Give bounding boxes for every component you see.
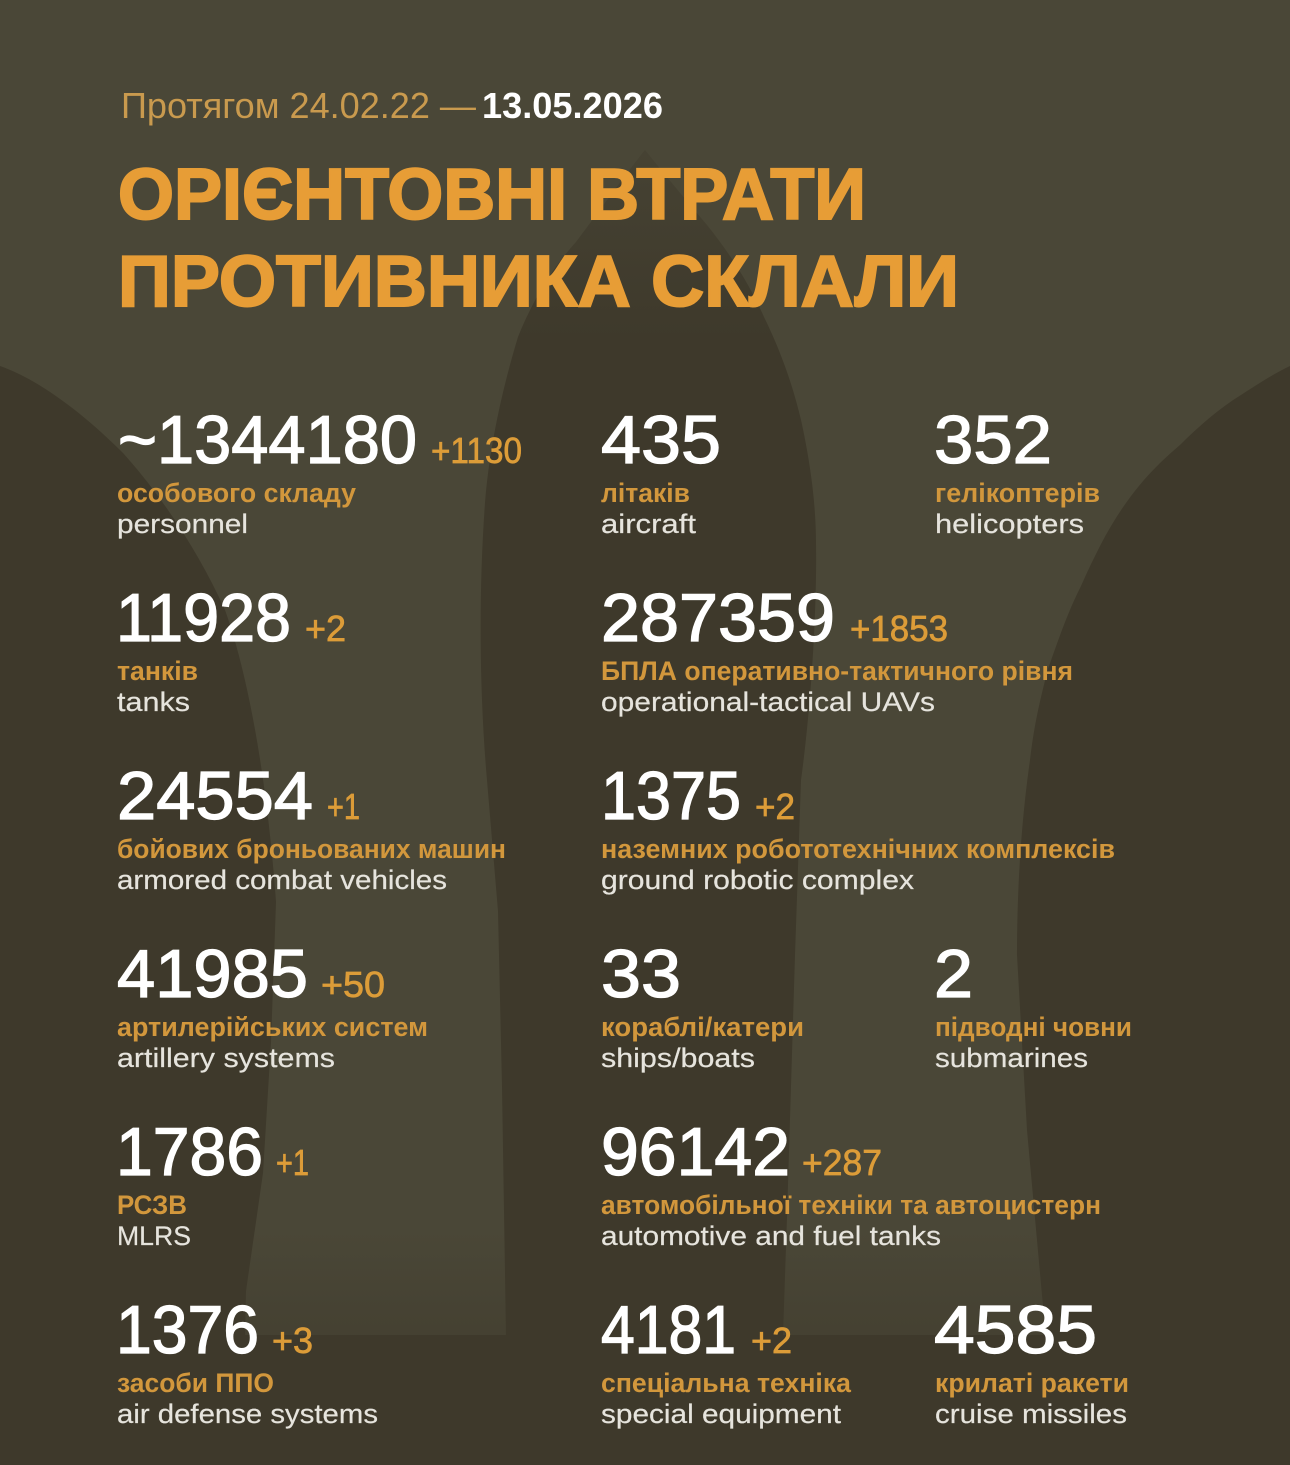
stat: aircraft: aircraft: [601, 509, 697, 539]
stat: special equipment: спеціальна техніка: [601, 1368, 852, 1398]
stat: MLRS: РСЗВ: [117, 1190, 187, 1220]
stat: ground robotic complex: наземних робототехнічних комплексів: [601, 834, 1115, 864]
stat: helicopters: helicopters: [935, 509, 1084, 539]
stat: automotive and fuel tanks: автомобільної техніки та автоцистерн: [601, 1190, 1101, 1220]
stat: operational-tactical UAVs: operational-tactical UAVs: [601, 687, 935, 717]
stat: artillery systems: +50: [321, 964, 385, 1005]
stat: cruise missiles: крилаті ракети: [935, 1368, 1129, 1398]
stat: ground robotic complex: +2: [755, 786, 795, 827]
stat: operational-tactical UAVs: +1853: [850, 608, 948, 649]
stat: ships/boats: 33: [601, 936, 681, 1012]
stat: helicopters: гелікоптерів: [935, 478, 1100, 508]
stat: artillery systems: artillery systems: [117, 1043, 335, 1073]
date range line: 13.05.2026: [482, 85, 663, 126]
stat: submarines: 2: [934, 936, 973, 1012]
stat: operational-tactical UAVs: [601, 580, 1073, 717]
stat: ground robotic complex: [601, 758, 1115, 895]
stat: MLRS: 1786: [116, 1114, 263, 1190]
stat: cruise missiles: cruise missiles: [935, 1399, 1127, 1429]
stat: special equipment: +2: [751, 1320, 792, 1361]
stat: armored combat vehicles: 24554: [117, 758, 313, 834]
stat: tanks: танків: [117, 656, 198, 686]
stat: automotive and fuel tanks: automotive and fuel tanks: [601, 1221, 941, 1251]
stat: personnel: [117, 402, 522, 539]
date range line: [121, 85, 663, 126]
stat: artillery systems: 41985: [117, 936, 308, 1012]
stat: personnel: +1130: [431, 430, 522, 471]
title: [118, 155, 959, 322]
stat: operational-tactical UAVs: 287359: [601, 580, 835, 656]
stat: submarines: submarines: [935, 1043, 1088, 1073]
date range line: Протягом 24.02.22 —: [121, 85, 476, 126]
stat: ships/boats: ships/boats: [601, 1043, 755, 1073]
stat: submarines: [934, 936, 1132, 1073]
stat: tanks: 11928: [116, 580, 291, 656]
stat: personnel: ~1344180: [118, 402, 417, 478]
title: ОРІЄНТОВНІ ВТРАТИ: [118, 155, 866, 235]
stat: personnel: особового складу: [117, 478, 356, 508]
stat: MLRS: +1: [276, 1142, 309, 1183]
stat: ground robotic complex: 1375: [601, 758, 741, 834]
stat: artillery systems: [117, 936, 428, 1073]
stat: submarines: підводні човни: [935, 1012, 1132, 1042]
stat: air defense systems: 1376: [116, 1292, 259, 1368]
stat: special equipment: 4181: [601, 1292, 736, 1368]
stat: air defense systems: +3: [272, 1320, 313, 1361]
stat: MLRS: MLRS: [117, 1221, 191, 1251]
stat: automotive and fuel tanks: 96142: [601, 1114, 790, 1190]
stat: tanks: tanks: [117, 687, 190, 717]
stat: air defense systems: air defense systems: [117, 1399, 378, 1429]
stat: ships/boats: [601, 936, 804, 1073]
stat: personnel: personnel: [117, 509, 248, 539]
stat: armored combat vehicles: бойових броньованих машин: [117, 834, 506, 864]
stat: aircraft: літаків: [601, 478, 690, 508]
stat: aircraft: [601, 402, 721, 539]
stat: ground robotic complex: ground robotic complex: [601, 865, 915, 895]
stat: air defense systems: [116, 1292, 378, 1429]
stat: armored combat vehicles: armored combat vehicles: [117, 865, 447, 895]
stat: air defense systems: засоби ППО: [117, 1368, 274, 1398]
stat: cruise missiles: [934, 1292, 1129, 1429]
stat: special equipment: [601, 1292, 852, 1429]
stat: MLRS: [116, 1114, 309, 1251]
stat: armored combat vehicles: [117, 758, 506, 895]
stat: special equipment: special equipment: [601, 1399, 842, 1429]
stat: armored combat vehicles: +1: [327, 786, 360, 827]
stat: operational-tactical UAVs: БПЛА оперативно-тактичного рівня: [601, 656, 1073, 686]
stat: tanks: [116, 580, 346, 717]
stat: tanks: +2: [305, 608, 346, 649]
stat: helicopters: [934, 402, 1100, 539]
stat: helicopters: 352: [934, 402, 1052, 478]
stat: ships/boats: кораблі/катери: [601, 1012, 804, 1042]
stat: automotive and fuel tanks: [601, 1114, 1101, 1251]
stat: cruise missiles: 4585: [934, 1292, 1097, 1368]
stat: aircraft: 435: [601, 402, 721, 478]
stat: artillery systems: артилерійських систем: [117, 1012, 428, 1042]
title: ПРОТИВНИКА СКЛАЛИ: [118, 242, 959, 322]
stat: automotive and fuel tanks: +287: [802, 1142, 882, 1183]
